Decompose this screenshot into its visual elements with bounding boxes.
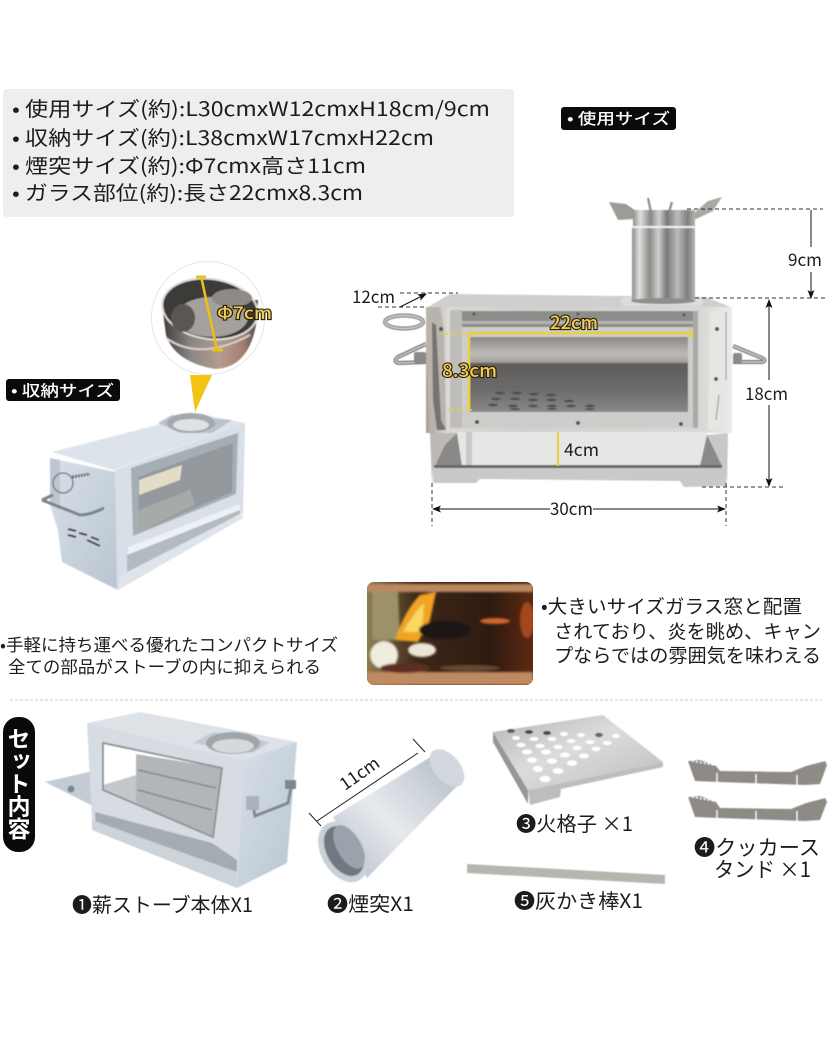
side ring: [385, 316, 423, 328]
chimney pipe photo: [312, 743, 471, 887]
caption: glass window: •大きいサイズガラス窓と配置: [541, 592, 802, 619]
chimney close-up circle: [152, 262, 272, 374]
rivets: [439, 312, 719, 426]
vents: [68, 529, 100, 546]
caption: ash rake: ❺灰かき棒X1: [514, 885, 643, 914]
window: [103, 743, 222, 837]
diameter value: Φ7cm: [217, 299, 272, 324]
ash tray opening: [127, 504, 240, 562]
dimension: glass width 22cm: 22cm: [550, 309, 598, 335]
fire grate photo: [493, 715, 663, 805]
dimension: 12cm: [352, 283, 458, 308]
handle: [42, 495, 104, 515]
spec line: usage size: • 使用サイズ(約):L30cmxW12cmxH18cm/9cm: [12, 93, 490, 122]
left handle: [396, 344, 426, 363]
spec line: storage size: • 収納サイズ(約):L38cmxW17cmxH22cm: [12, 122, 434, 151]
front face: [87, 723, 243, 887]
caption: fire grate: ❸火格子 ×1: [516, 808, 633, 837]
spec line: glass size: • ガラス部位(約):長さ22cmx8.3cm: [12, 177, 363, 206]
fire window photo: [367, 582, 534, 685]
dimension: 18cm: 18cm: [745, 380, 788, 405]
dimension: 9cm: [687, 209, 828, 298]
dimension: 30cm: [432, 483, 726, 526]
caption: stove body: ❶薪ストーブ本体X1: [72, 889, 253, 918]
cooker stand wings: [609, 202, 636, 220]
door flap: [45, 771, 93, 806]
spec line: chimney size: • 煙突サイズ(約):Φ7cmx高さ11cm: [12, 150, 366, 179]
caption: cooker stand: タンド ×1: [714, 854, 811, 884]
top face: [87, 712, 297, 760]
top plate hole: [158, 415, 232, 433]
stove body photo: [45, 712, 297, 888]
side face: [50, 458, 118, 590]
cooker stand parts: [688, 760, 827, 821]
ash rake: [467, 864, 665, 884]
top plate: [428, 294, 733, 308]
caption: compact: 全ての部品がストーブの内に抑えられる: [8, 653, 321, 678]
dimension: 12cm: 12cm: [352, 283, 395, 308]
main stove photo: [385, 294, 764, 487]
label: storage size: • 収納サイズ: [11, 379, 114, 401]
glass: [470, 337, 688, 412]
label: usage size: • 使用サイズ: [567, 107, 670, 129]
window: [131, 433, 238, 536]
ash tray: [457, 432, 707, 466]
window frame: [462, 311, 698, 428]
caption: cooker stand: ❹クッカース: [694, 832, 820, 862]
dimension: chimney length 11cm: 11cm: [334, 749, 384, 795]
right face: [237, 742, 297, 888]
pointer triangle: [190, 375, 212, 412]
caption: compact: [0, 631, 338, 678]
caption: glass window: [541, 592, 821, 668]
body: [426, 307, 732, 433]
dimension: 9cm: 9cm: [788, 246, 822, 271]
handle: [252, 782, 292, 816]
right handle: [733, 346, 764, 362]
prongs: [648, 198, 672, 222]
dimension: chimney length 11cm: [309, 739, 425, 826]
front face: [115, 423, 245, 590]
dimension: tray height 4cm: 4cm: [564, 436, 599, 461]
caption: compact: •手軽に持ち運べる優れたコンパクトサイズ: [0, 631, 338, 656]
chimney with cooker stand: [609, 197, 722, 306]
sidebar heading: セット内容: [2, 727, 36, 840]
ash drawer: [95, 812, 237, 872]
dimension: glass height 8.3cm: [442, 333, 497, 410]
caption: cooker stand: [694, 832, 820, 884]
caption: glass window: されており、炎を眺め、キャン: [554, 617, 821, 644]
dimension: 30cm: 30cm: [550, 495, 593, 520]
top face: [52, 414, 245, 470]
dimension: tray height 4cm: [558, 432, 599, 466]
dimension: glass height 8.3cm: 8.3cm: [442, 357, 497, 383]
spec panel: [3, 89, 514, 217]
caption: glass window: プならではの雰囲気を味わえる: [554, 641, 821, 668]
caption: chimney: ❷煙突X1: [327, 888, 414, 917]
storage stove photo: [42, 413, 245, 590]
